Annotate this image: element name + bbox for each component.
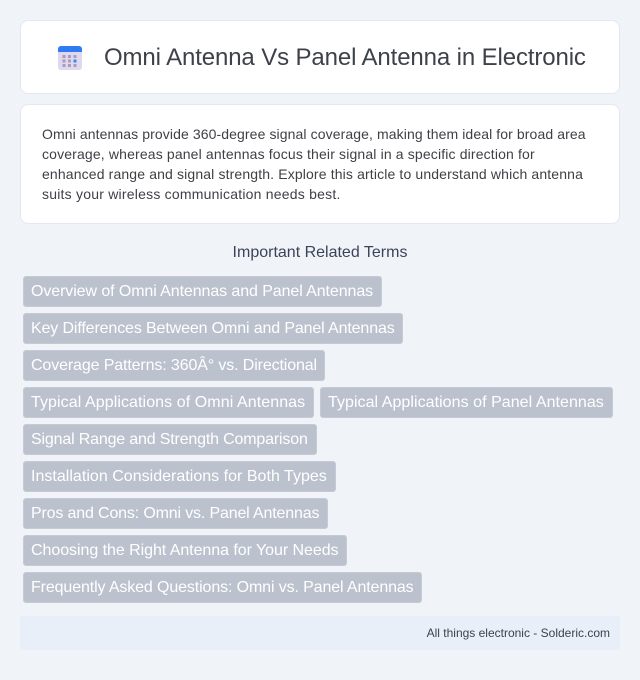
tag	[23, 313, 403, 344]
tag: Key Differences Between Omni and Panel Antennas	[31, 320, 395, 337]
tag	[23, 387, 314, 418]
tag: Installation Considerations for Both Types	[31, 468, 327, 485]
tag	[23, 498, 328, 529]
tag: Signal Range and Strength Comparison	[31, 431, 308, 448]
tag	[23, 535, 347, 566]
intro card	[20, 104, 620, 224]
tag: Pros and Cons: Omni vs. Panel Antennas	[31, 505, 319, 522]
tag	[23, 461, 336, 492]
tag	[23, 424, 317, 455]
intro paragraph: suits your wireless communication needs best.	[42, 186, 341, 202]
intro paragraph	[42, 126, 586, 202]
footer bar: All things electronic - Solderic.com	[427, 626, 610, 640]
tag: Overview of Omni Antennas and Panel Antennas	[31, 283, 373, 300]
header card	[20, 20, 620, 94]
tag: Typical Applications of Omni Antennas	[31, 394, 305, 411]
title: Omni Antenna Vs Panel Antenna in Electronic	[104, 44, 586, 71]
tag	[23, 572, 422, 603]
tag: Choosing the Right Antenna for Your Needs	[31, 542, 339, 559]
tag: Typical Applications of Panel Antennas	[328, 394, 604, 411]
section heading: Important Related Terms	[233, 244, 407, 261]
tag: Coverage Patterns: 360Â° vs. Directional	[31, 357, 317, 374]
tag: Frequently Asked Questions: Omni vs. Panel Antennas	[31, 579, 414, 596]
intro paragraph: coverage, whereas panel antennas focus their signal in a specific direction for	[42, 146, 535, 162]
icon: calendar	[58, 46, 82, 70]
tag	[23, 350, 325, 381]
intro paragraph: Omni antennas provide 360-degree signal coverage, making them ideal for broad area	[42, 126, 586, 142]
intro paragraph: enhanced range and signal strength. Explore this article to understand which antenna	[42, 166, 583, 182]
tag	[23, 276, 382, 307]
tag	[320, 387, 613, 418]
tag list	[23, 276, 613, 603]
footer bar	[20, 616, 620, 650]
